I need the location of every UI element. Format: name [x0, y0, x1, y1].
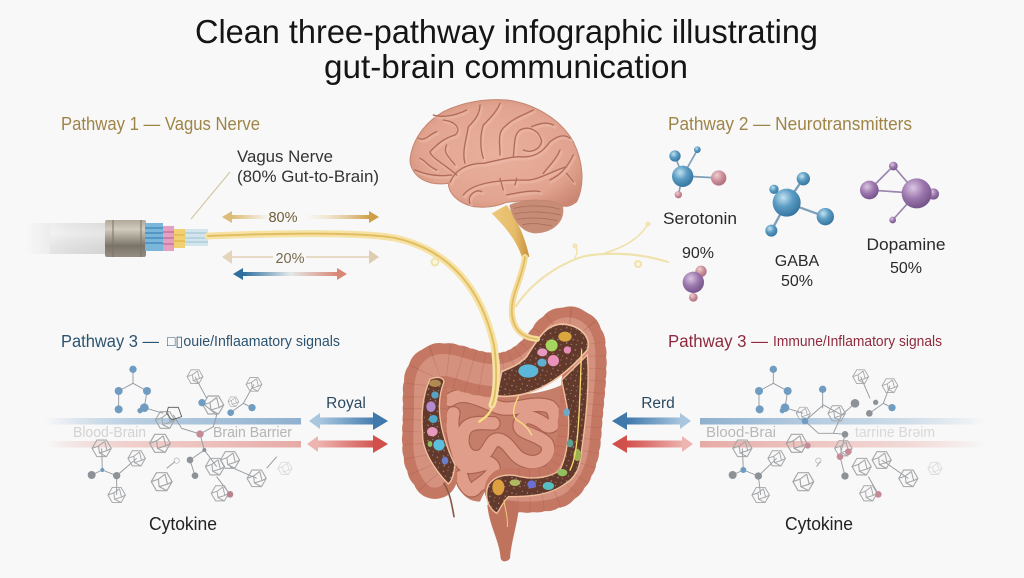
illustration: intestines — [422, 324, 588, 561]
brain stem — [492, 205, 529, 258]
arrow: 80 percent — [222, 210, 379, 226]
heading: pathway 3 left: Pathway 3 — — [61, 331, 159, 351]
vagus nerve pathway: gold fibre to gut — [208, 234, 496, 405]
label: vagus nerve: Vagus Nerve — [237, 147, 333, 166]
heading: pathway 2: Pathway 2 — Neurotransmitters — [668, 114, 912, 134]
window: descending colon — [487, 355, 588, 513]
barrier: right: tarrine Brəim — [855, 425, 935, 441]
molecule: serotonin — [669, 146, 726, 198]
barrier: left: Brain Barrier — [213, 425, 292, 441]
cerebellum — [509, 200, 563, 233]
barrier: left — [45, 418, 301, 448]
heading: pathway 3 right — [668, 331, 942, 351]
label: cytokine left: Cytokine — [149, 514, 217, 534]
label: cytokine right: Cytokine — [785, 514, 853, 534]
barrier: right — [700, 418, 985, 448]
labels: neurotransmitters: 50% — [890, 260, 922, 277]
labels: neurotransmitters — [663, 209, 946, 290]
heading: pathway 3 left — [61, 331, 340, 351]
labels: neurotransmitters: Dopamine — [866, 235, 946, 254]
leader line — [191, 172, 230, 219]
arrow: 20 percent: 20% — [275, 251, 305, 267]
arrow: blue left — [309, 412, 388, 430]
heading: pathway 3 right: Immune/Inflamatory signals — [773, 334, 942, 350]
appendix — [444, 483, 454, 517]
heading: pathway 3 left: □▯ouie/Inflaamatory signals — [167, 334, 340, 350]
brain-to-gut fibre — [512, 257, 537, 339]
heading: pathway 3 right: Pathway 3 — — [668, 331, 768, 351]
arrow: red right — [612, 435, 693, 453]
illustration: brain — [410, 100, 582, 258]
barrier: left: Blood-Brain — [73, 425, 146, 441]
small intestine — [441, 383, 563, 502]
neurotransmitter branch fibre — [432, 222, 668, 306]
labels: neurotransmitters: 50% — [781, 273, 813, 290]
arrow: 20 percent — [222, 250, 379, 267]
gut nerves — [479, 350, 582, 527]
molecule: serotonin lower — [683, 266, 707, 302]
arrow: afferent efferent — [233, 268, 347, 280]
labels: neurotransmitters: 90% — [682, 245, 714, 262]
arrow: 80 percent: 80% — [268, 210, 298, 226]
label: vagus nerve: (80% Gut-to-Brain) — [237, 167, 379, 186]
window: ascending colon — [422, 377, 455, 484]
arrow: blue right — [612, 412, 691, 430]
barrier: right: Blood-Brai — [706, 425, 776, 441]
molecules: cytokine left — [88, 366, 292, 503]
cerebrum — [410, 100, 582, 207]
molecule: dopamine — [860, 162, 939, 223]
colon — [424, 328, 584, 491]
window: transverse colon — [497, 324, 588, 396]
molecules: cytokine right — [729, 366, 942, 503]
rectum — [487, 500, 519, 561]
molecules: neurotransmitters — [669, 146, 939, 302]
labels: neurotransmitters: Serotonin — [663, 209, 737, 228]
arrow: red left — [307, 435, 388, 453]
label: vagus nerve — [237, 147, 379, 186]
illustration: nerve cable — [25, 220, 208, 257]
title: Clean three-pathway infographic illustrating — [195, 13, 818, 50]
title — [195, 13, 818, 85]
labels: neurotransmitters: GABA — [775, 253, 820, 270]
label: royal: Royal — [326, 395, 366, 412]
title: gut-brain communication — [324, 48, 688, 85]
molecule: GABA — [765, 172, 834, 237]
heading: pathway 1: Pathway 1 — Vagus Nerve — [61, 114, 260, 134]
label: rerd: Rerd — [641, 395, 675, 412]
